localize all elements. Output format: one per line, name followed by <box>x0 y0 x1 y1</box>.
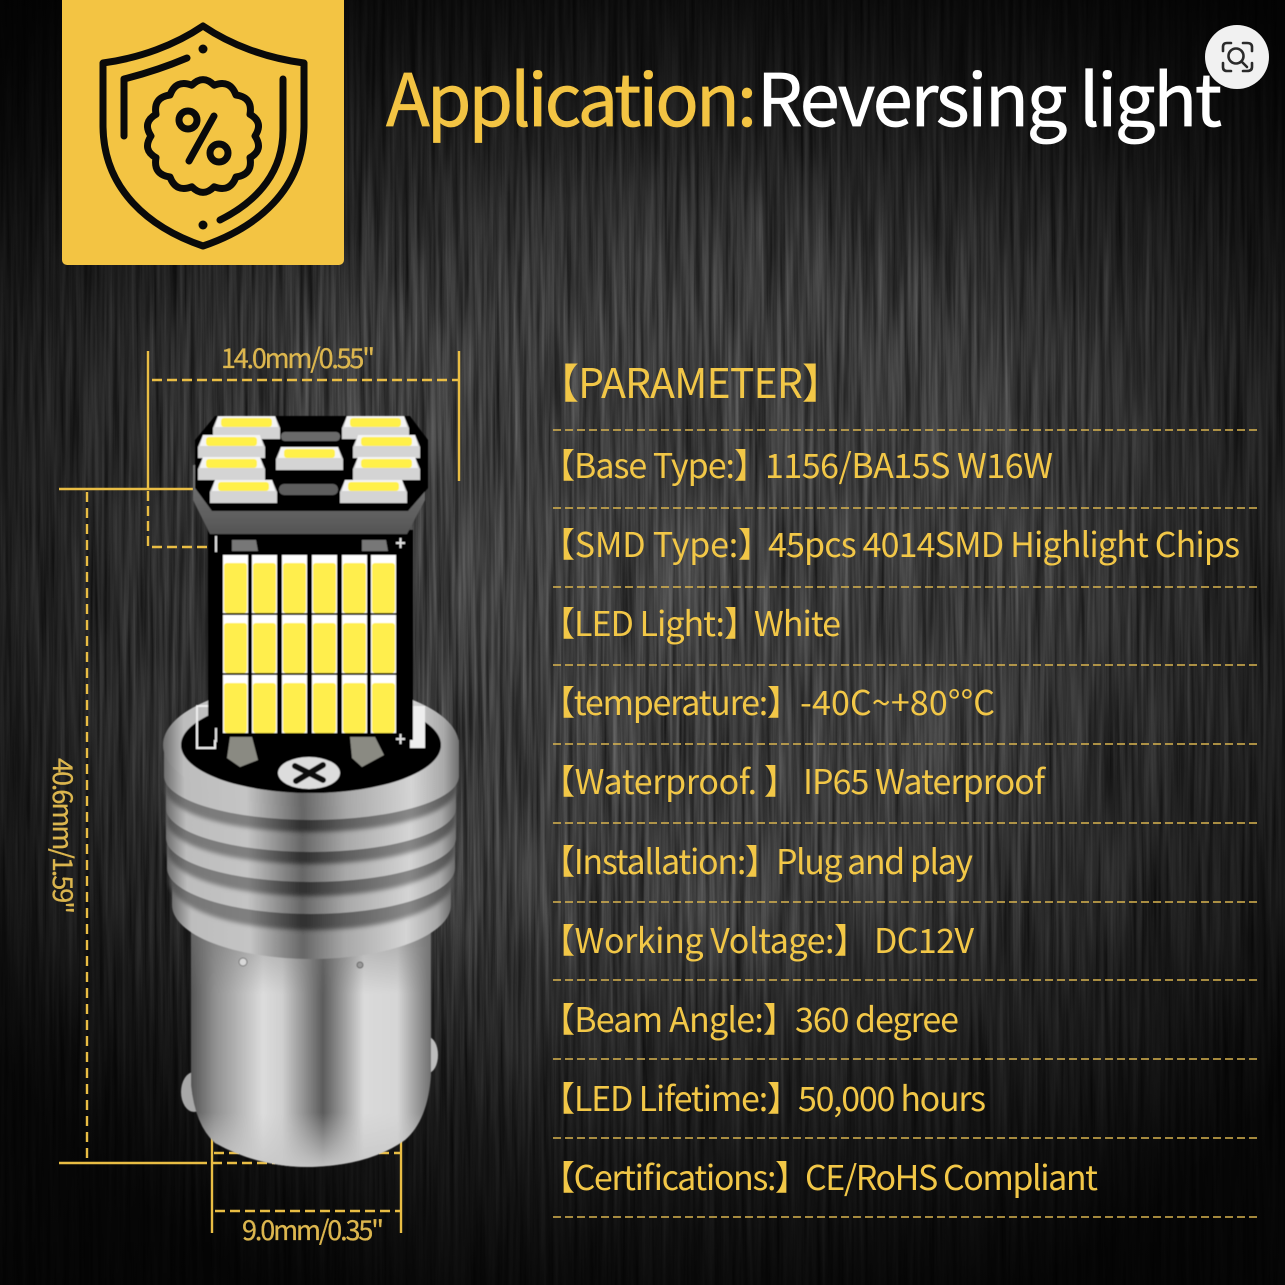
heading: PARAMETER: 【PARAMETER】 <box>538 350 843 410</box>
row: waterproof: IP65 Waterproof <box>803 755 1047 804</box>
row: temperature: 【temperature:】 <box>541 676 801 725</box>
bulb base cylinder <box>181 900 438 1167</box>
row: base type: 1156/BA15S W16W <box>765 439 1053 488</box>
heat sink ribs <box>164 740 459 959</box>
dimension: width 14.0mm <box>148 337 459 547</box>
title: Reversing light <box>757 42 1222 147</box>
row: SMD type: 45pcs 4014SMD Highlight Chips <box>768 518 1240 567</box>
row: installation: 【Installation:】 <box>541 835 779 884</box>
row: installation <box>541 835 973 884</box>
row: base type: 【Base Type:】 <box>541 439 768 488</box>
row: base type <box>541 439 1053 488</box>
row: LED lifetime: 50,000 hours <box>798 1072 986 1121</box>
row: certifications: CE/RoHS Compliant <box>805 1151 1098 1200</box>
row: temperature: -40C~+80°°C <box>800 676 995 725</box>
row: waterproof <box>541 755 1047 804</box>
icon: shield with percent badge <box>103 26 304 246</box>
row: LED lifetime: 【LED Lifetime:】 <box>541 1072 801 1121</box>
dimension: base 9.0mm: 9.0mm/0.35" <box>242 1209 384 1248</box>
LED chip grid <box>223 555 396 733</box>
row: beam angle <box>541 993 959 1042</box>
dimension: width 14.0mm: 14.0mm/0.55" <box>221 337 375 376</box>
row: working voltage: 【Working Voltage:】 <box>541 914 868 963</box>
top board with end chips <box>193 416 428 534</box>
row: LED lifetime <box>541 1072 986 1121</box>
locking pin right <box>418 1037 438 1073</box>
title <box>386 42 1222 147</box>
icon: visual search button <box>1205 25 1269 89</box>
title: Application: <box>386 42 757 147</box>
LED bulb <box>163 416 459 1167</box>
table dashed dividers <box>553 430 1259 1217</box>
dimension: length 40.6mm: 40.6mm/1.59" <box>45 758 84 914</box>
row: certifications: 【Certifications:】 <box>541 1151 809 1200</box>
row: certifications <box>541 1151 1098 1200</box>
screw <box>278 757 340 789</box>
row: beam angle: 360 degree <box>795 993 959 1042</box>
row: temperature <box>541 676 995 725</box>
row: beam angle: 【Beam Angle:】 <box>541 993 797 1042</box>
row: LED light: White <box>754 597 841 646</box>
row: installation: Plug and play <box>776 835 973 884</box>
row: waterproof: 【Waterproof. 】 <box>541 755 798 804</box>
front circuit board <box>208 530 413 767</box>
row: LED light: 【LED Light:】 <box>541 597 758 646</box>
yellow icon panel <box>62 0 344 265</box>
row: working voltage: DC12V <box>874 914 974 963</box>
row: SMD type <box>541 518 1240 567</box>
parameter table <box>538 350 1259 1217</box>
row: SMD type: 【SMD Type:】 <box>541 518 772 567</box>
locking pin left <box>181 1072 207 1112</box>
top ring <box>163 683 459 807</box>
